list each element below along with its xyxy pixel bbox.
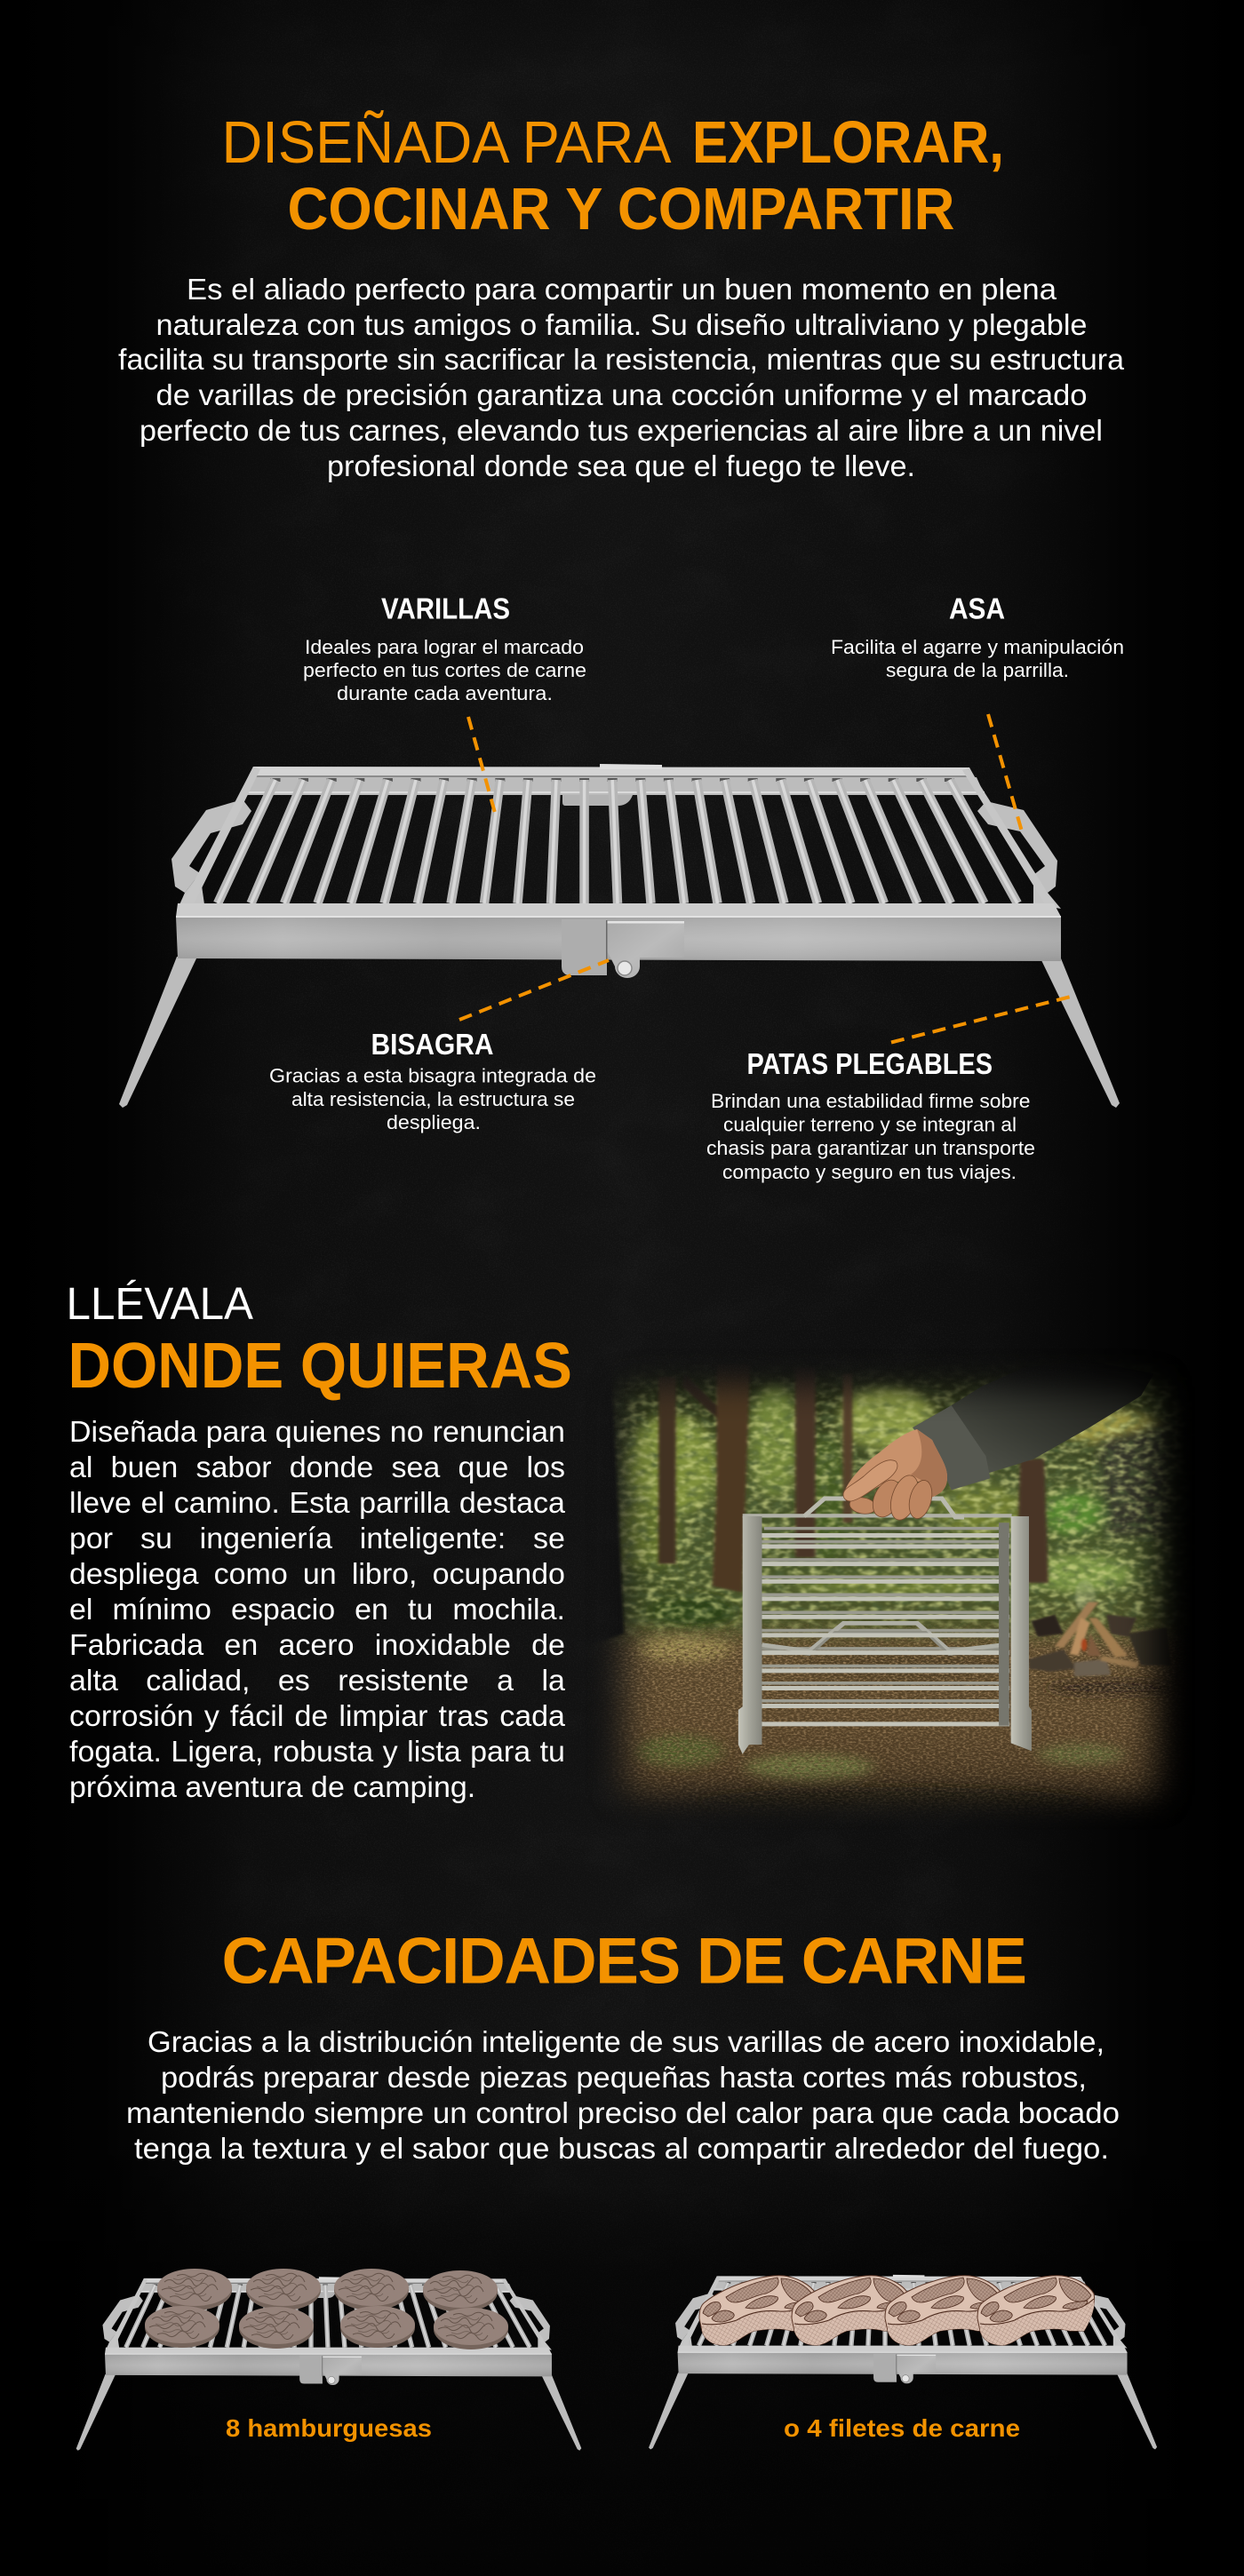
label: 8 hamburguesas: 8 hamburguesas (226, 2414, 432, 2442)
callout: patas plegables (706, 1047, 1035, 1183)
arrow: asa (988, 714, 1022, 831)
folded grill (738, 1514, 1032, 1754)
callout: varillas: VARILLAS (381, 592, 510, 625)
callout: patas plegables: cualquier terreno y se integran al (723, 1114, 1017, 1135)
callout: varillas: perfecto en tus cortes de carne (303, 659, 586, 681)
callout: varillas: Ideales para lograr el marcado (305, 636, 584, 658)
callout: bisagra: despliega. (387, 1111, 481, 1133)
heading: llévala donde quieras: LLÉVALA (66, 1278, 253, 1329)
title (222, 109, 1004, 242)
paragraph: llévala body text: Fabricada en acero inoxidable de (69, 1628, 565, 1661)
paragraph: llévala body text: despliega como un libro, ocupando (69, 1557, 565, 1590)
intro paragraph (118, 273, 1125, 482)
paragraph: llévala body text: Diseñada para quienes no renuncian (69, 1415, 565, 1448)
callout: varillas (303, 592, 586, 704)
paragraph: llévala body text (69, 1415, 565, 1803)
callout: patas plegables: chasis para garantizar un transporte (706, 1137, 1035, 1159)
photo: hand holding folded grill in forest (602, 1371, 1180, 1816)
paragraph: llévala body text: al buen sabor donde sea que los (69, 1451, 565, 1483)
textured black background (153, 0, 1096, 2471)
callout: asa: Facilita el agarre y manipulación (831, 636, 1124, 658)
heading: llévala donde quieras (66, 1278, 572, 1402)
title: COCINAR Y COMPARTIR (288, 176, 954, 242)
intro paragraph: de varillas de precisión garantiza una cocción uniforme y el marcado (156, 378, 1088, 411)
intro paragraph: naturaleza con tus amigos o familia. Su diseño ultraliviano y plegable (156, 308, 1088, 341)
capacity paragraph (126, 2025, 1120, 2165)
callout: asa: segura de la parrilla. (886, 659, 1069, 681)
intro paragraph: Es el aliado perfecto para compartir un buen momento en plena (187, 273, 1057, 306)
heading: llévala donde quieras: DONDE QUIERAS (68, 1331, 572, 1402)
paragraph: llévala body text: lleve el camino. Esta parrilla destaca (69, 1486, 565, 1519)
callout: asa: ASA (949, 592, 1005, 625)
paragraph: llévala body text: alta calidad, es resistente a la (69, 1664, 565, 1697)
grill with 8 hamburgers (76, 2269, 581, 2451)
paragraph: llévala body text: próxima aventura de camping. (69, 1770, 475, 1803)
callout: varillas: durante cada aventura. (337, 682, 553, 704)
paragraph: llévala body text: fogata. Ligera, robusta y lista para tu (69, 1735, 565, 1768)
paragraph: llévala body text: por su ingeniería inteligente: se (69, 1522, 565, 1554)
callout: bisagra: BISAGRA (371, 1028, 494, 1061)
sleeve (913, 1375, 1150, 1491)
main grill illustration (119, 764, 1120, 1108)
callout: patas plegables: Brindan una estabilidad firme sobre (711, 1090, 1031, 1112)
hand gripping the handle (804, 1429, 964, 1523)
intro paragraph: profesional donde sea que el fuego te lleve. (327, 449, 915, 482)
title: DISEÑADA PARA (222, 109, 672, 176)
arrow: varillas (468, 717, 495, 813)
section: capacidades de carne heading: CAPACIDADES DE CARNE (222, 1926, 1027, 1998)
grill with 4 steaks (649, 2275, 1157, 2449)
tree trunks (601, 1373, 1050, 1638)
capacity paragraph: podrás preparar desde piezas pequeñas hasta cortes más robustos, (161, 2061, 1087, 2094)
intro paragraph: facilita su transporte sin sacrificar la resistencia, mientras que su estructura (118, 343, 1125, 376)
capacity paragraph: tenga la textura y el sabor que buscas al compartir alrededor del fuego. (134, 2132, 1109, 2165)
capacity paragraph: Gracias a la distribución inteligente de sus varillas de acero inoxidable, (148, 2025, 1104, 2058)
campfire (1029, 1579, 1171, 1676)
forest and ground backdrop (602, 1371, 1180, 1816)
callout: bisagra (269, 1028, 596, 1133)
title: EXPLORAR, (692, 109, 1004, 176)
callout: asa (831, 592, 1124, 681)
paragraph: llévala body text: el mínimo espacio en tu mochila. (69, 1593, 565, 1626)
arrow: bisagra (459, 960, 609, 1020)
arrow: patas plegables (891, 997, 1071, 1043)
callout: patas plegables: PATAS PLEGABLES (746, 1047, 993, 1080)
capacity paragraph: manteniendo siempre un control preciso del calor para que cada bocado (126, 2096, 1120, 2129)
label: o 4 filetes de carne: o 4 filetes de carne (784, 2414, 1020, 2442)
callout: bisagra: alta resistencia, la estructura se (291, 1088, 575, 1110)
callout: patas plegables: compacto y seguro en tus viajes. (722, 1161, 1017, 1183)
callout: bisagra: Gracias a esta bisagra integrada de (269, 1064, 596, 1087)
intro paragraph: perfecto de tus carnes, elevando tus experiencias al aire libre a un nivel (140, 414, 1103, 447)
paragraph: llévala body text: corrosión y fácil de limpiar tras cada (69, 1699, 565, 1732)
